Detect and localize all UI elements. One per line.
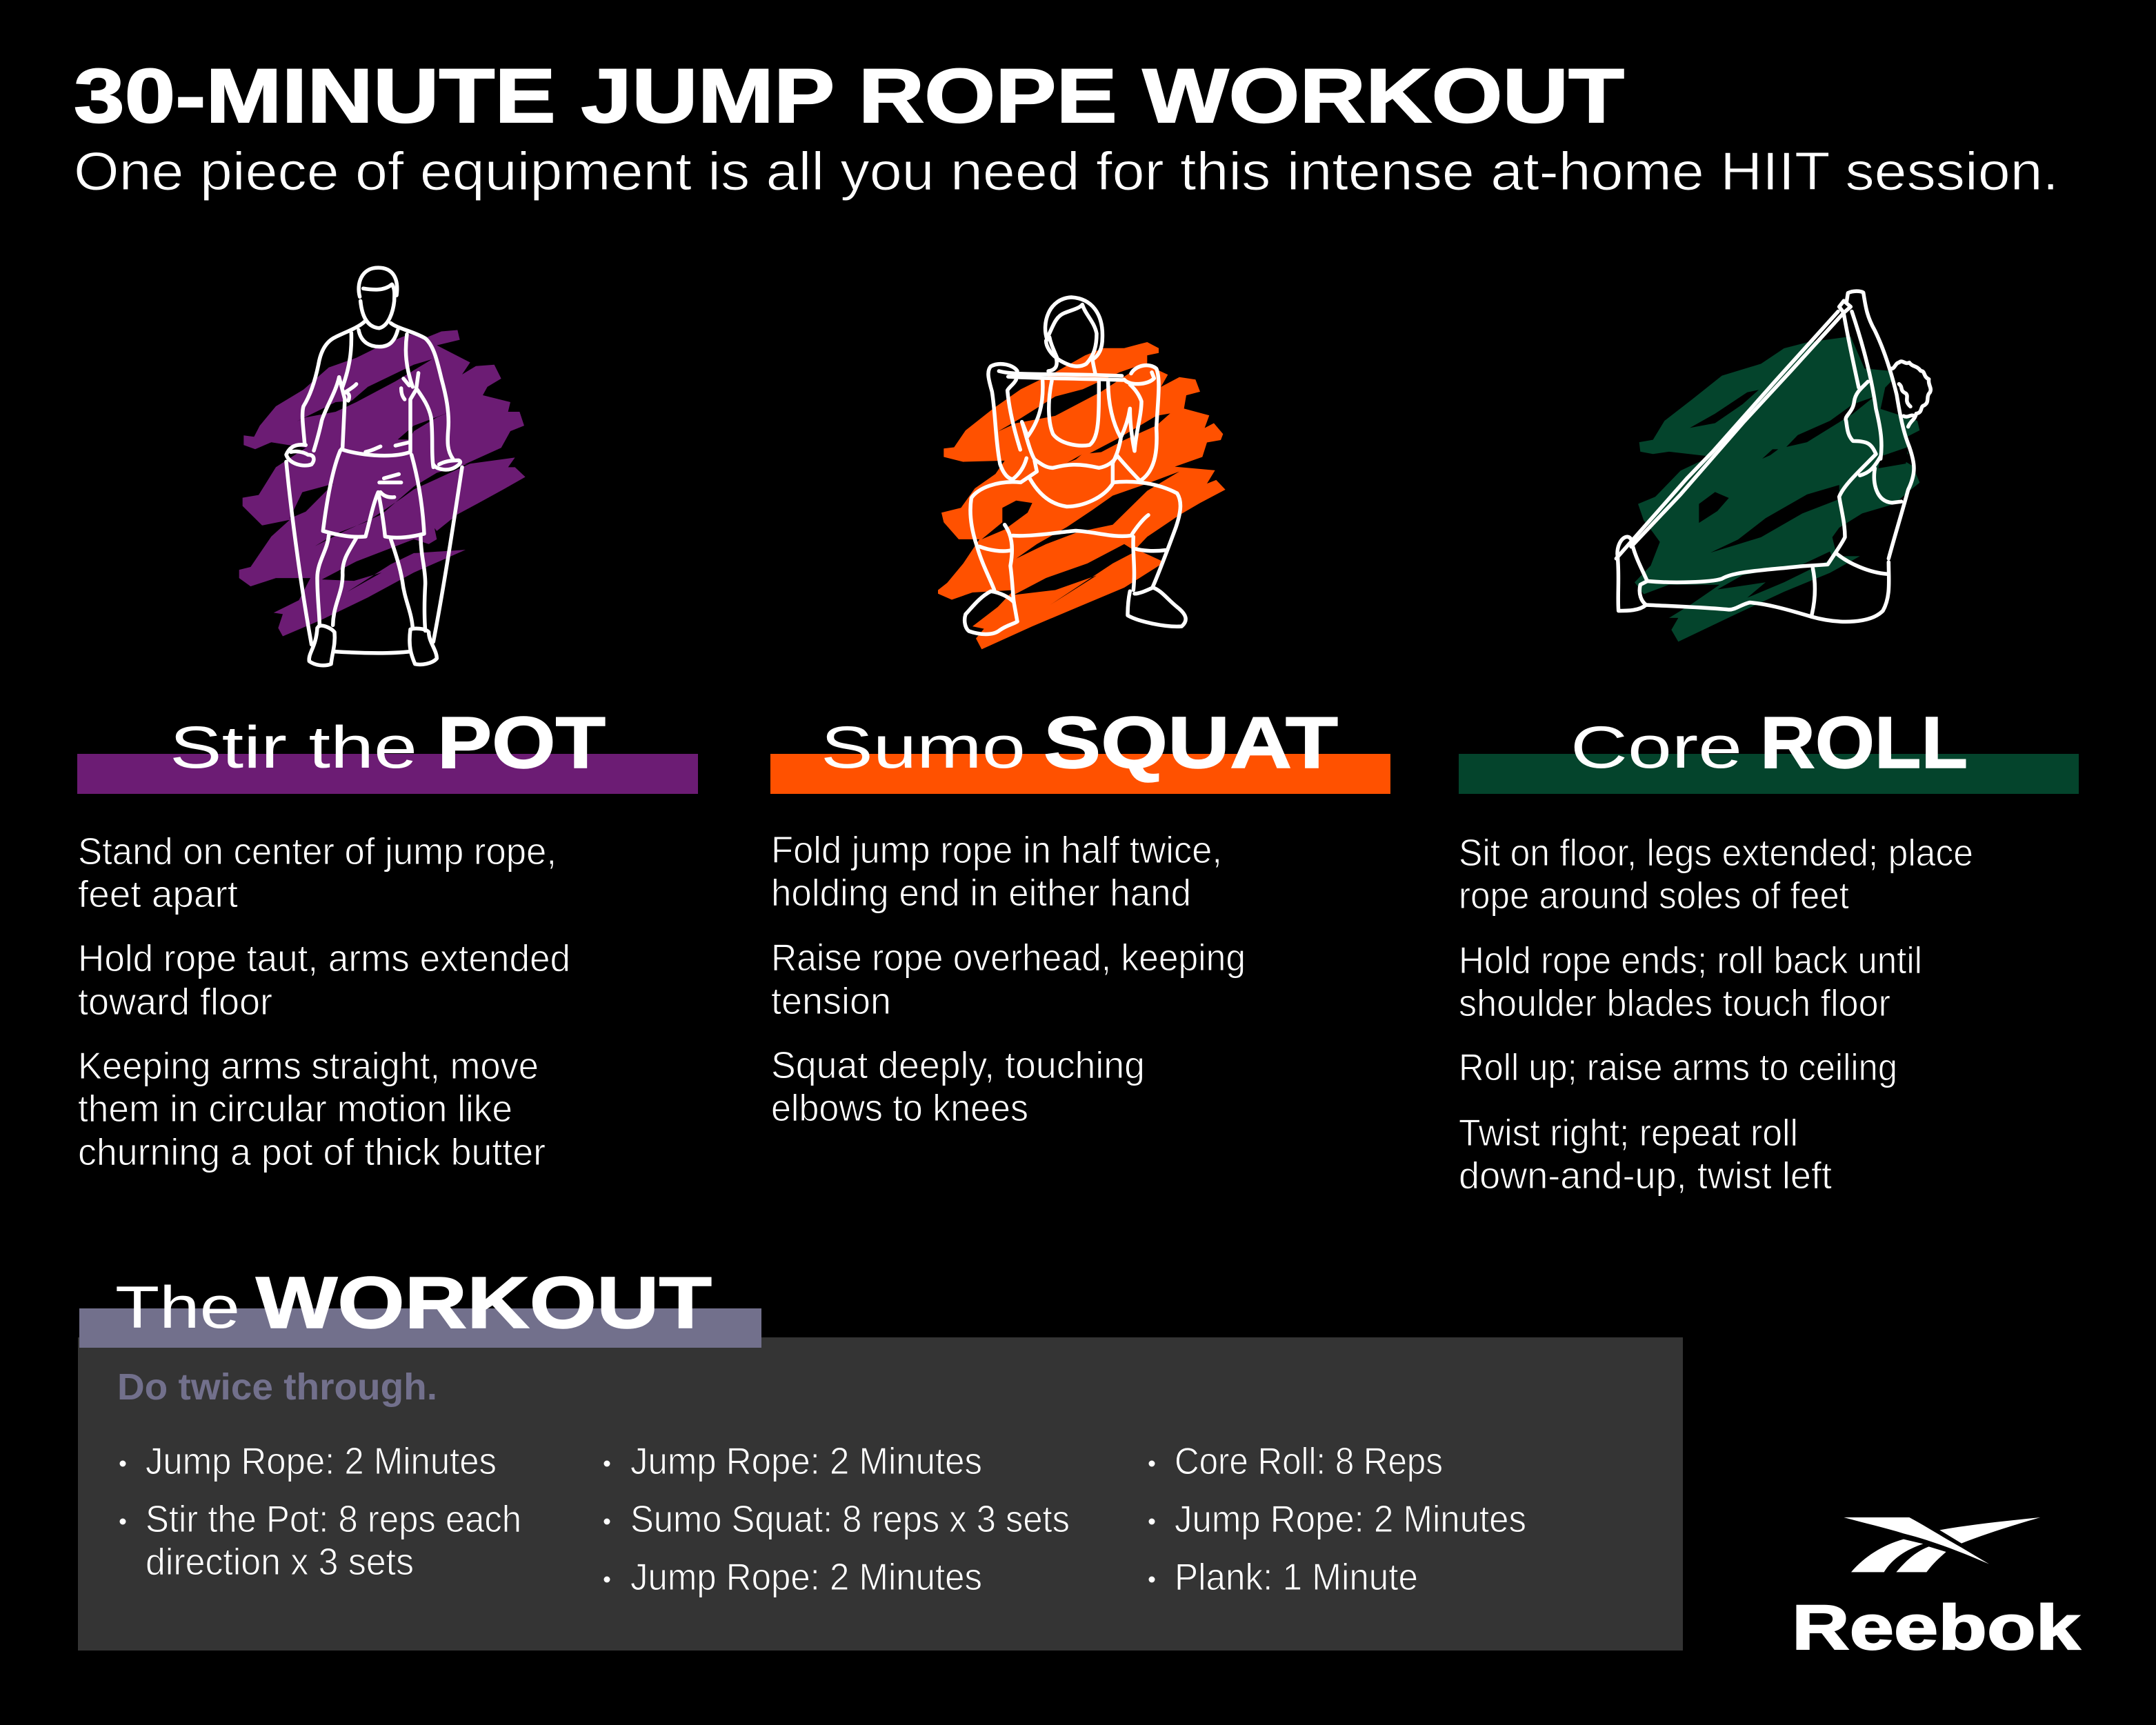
heading: core roll: Core <box>1570 715 1742 781</box>
steps: sumo squat: Raise rope overhead, keeping <box>771 936 1246 979</box>
heading: sumo squat: Sumo <box>821 715 1026 781</box>
list: first column: direction x 3 sets <box>146 1540 414 1583</box>
list: first column: Stir the Pot: 8 reps each <box>146 1497 521 1540</box>
heading: sumo squat: SQUAT <box>1044 702 1338 784</box>
heading: stir the pot <box>170 702 606 784</box>
steps: core roll: down-and-up, twist left <box>1459 1154 1832 1197</box>
illustration: sumo squat figure <box>938 297 1226 649</box>
header bar: core roll <box>1459 754 2079 794</box>
list: third column <box>1149 1439 1526 1598</box>
list: second column: Sumo Squat: 8 reps x 3 sets <box>630 1497 1070 1540</box>
steps: sumo squat: Squat deeply, touching <box>771 1044 1145 1086</box>
steps: stir the pot: Stand on center of jump rope, <box>78 830 557 873</box>
steps: sumo squat: Fold jump rope in half twice, <box>771 828 1222 871</box>
steps: core roll: rope around soles of feet <box>1459 874 1849 917</box>
subtitle: One piece of equipment is all you need for this intense at-home HIIT session. <box>74 141 2059 201</box>
steps: stir the pot <box>78 830 570 1173</box>
list: second column: Jump Rope: 2 Minutes <box>630 1439 982 1482</box>
heading: the workout: WORKOUT <box>256 1262 712 1344</box>
header bar: the workout <box>79 1308 761 1348</box>
heading: sumo squat <box>821 702 1338 784</box>
steps: stir the pot: Hold rope taut, arms extended <box>78 937 570 979</box>
steps: core roll <box>1459 831 1973 1197</box>
steps: stir the pot: toward floor <box>78 980 272 1023</box>
line art: woman rolling back with rope <box>1616 291 1930 621</box>
panel: core roll <box>1459 702 2079 1197</box>
steps: stir the pot: feet apart <box>78 873 238 915</box>
line art: man with rope <box>286 268 462 666</box>
list: first column <box>120 1439 521 1583</box>
steps: sumo squat: holding end in either hand <box>771 871 1191 914</box>
heading: the workout <box>115 1262 712 1344</box>
panel background <box>78 1337 1683 1651</box>
steps: core roll: shoulder blades touch floor <box>1459 981 1890 1024</box>
steps: sumo squat <box>771 828 1246 1129</box>
list: second column <box>604 1439 1070 1598</box>
steps: sumo squat: elbows to knees <box>771 1086 1028 1129</box>
panel: the workout <box>78 1262 1683 1651</box>
heading: stir the pot: Stir the <box>170 715 417 781</box>
heading: stir the pot: POT <box>437 702 606 784</box>
heading: core roll: ROLL <box>1760 702 1968 784</box>
header bar: stir the pot <box>77 754 698 794</box>
steps: core roll: Hold rope ends; roll back until <box>1459 939 1922 981</box>
heading: the workout: The <box>115 1275 240 1341</box>
header bar: sumo squat <box>770 754 1390 794</box>
title: 30-MINUTE JUMP ROPE WORKOUT <box>74 53 1624 139</box>
icon: reebok delta mark <box>1844 1517 2040 1572</box>
panel: sumo squat <box>770 702 1390 1129</box>
steps: core roll: Sit on floor, legs extended; place <box>1459 831 1973 874</box>
list: third column: Plank: 1 Minute <box>1175 1555 1418 1598</box>
steps: core roll: Roll up; raise arms to ceiling <box>1459 1046 1897 1088</box>
illustration: stir the pot figure <box>239 268 526 666</box>
logo: reebok <box>1792 1517 2081 1663</box>
wordmark: Reebok <box>1792 1593 2081 1663</box>
steps: stir the pot: Keeping arms straight, move <box>78 1044 539 1087</box>
panel: stir the pot <box>77 702 698 1173</box>
heading: core roll <box>1570 702 1968 784</box>
steps: stir the pot: them in circular motion like <box>78 1087 512 1130</box>
note: do twice through: Do twice through. <box>117 1366 437 1408</box>
list: third column: Core Roll: 8 Reps <box>1175 1439 1443 1482</box>
illustration: core roll figure <box>1616 291 1930 641</box>
steps: stir the pot: churning a pot of thick butter <box>78 1130 546 1173</box>
list: second column: Jump Rope: 2 Minutes <box>630 1555 982 1598</box>
list: third column: Jump Rope: 2 Minutes <box>1175 1497 1526 1540</box>
line art: woman squatting <box>965 297 1186 634</box>
steps: core roll: Twist right; repeat roll <box>1459 1111 1798 1154</box>
list: first column: Jump Rope: 2 Minutes <box>146 1439 497 1482</box>
steps: sumo squat: tension <box>771 979 891 1022</box>
